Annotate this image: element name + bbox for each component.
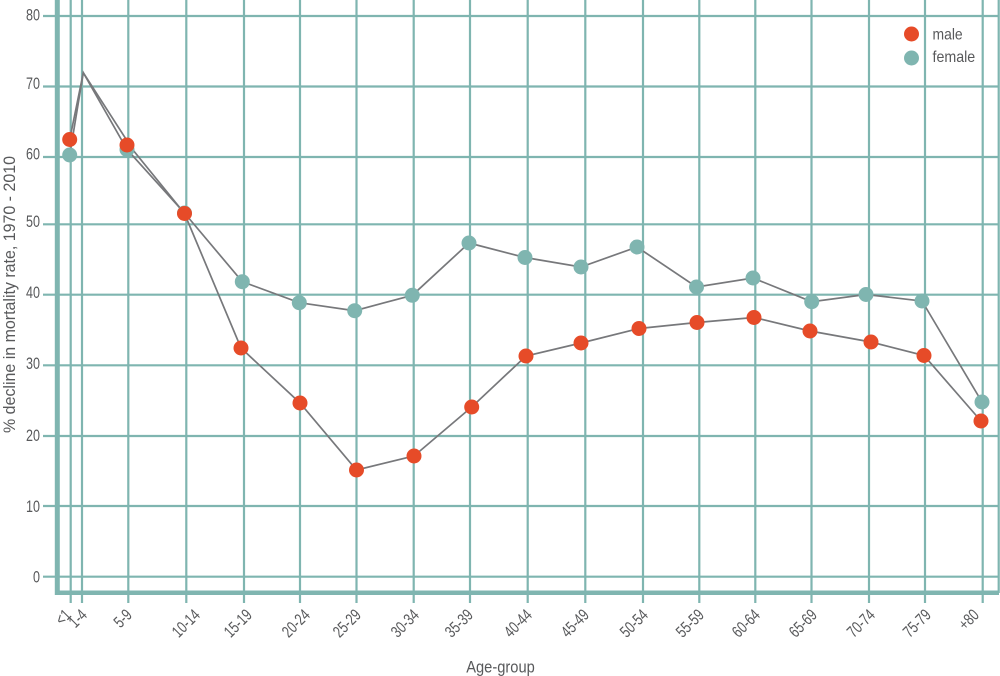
x-axis age-group labels: 5-9 [111, 606, 136, 632]
y-axis tick labels: 80 [26, 7, 40, 25]
x-axis age-group labels: 75-79 [900, 606, 935, 642]
y-axis tick labels: 10 [26, 498, 40, 517]
x-axis age-group labels: 60-64 [729, 606, 764, 642]
x-axis age-group labels: 1-4 [66, 606, 91, 632]
x-axis age-group labels: 35-39 [442, 606, 477, 642]
x-axis age-group labels: 25-29 [330, 606, 365, 642]
y-axis tick labels: 20 [26, 427, 40, 446]
y-axis tick labels [26, 7, 40, 587]
y-axis tick labels: 30 [26, 355, 40, 374]
line: female series [70, 73, 982, 402]
female data points [62, 142, 989, 410]
x-axis age-group labels: 30-34 [388, 606, 423, 642]
x-axis age-group labels: 15-19 [221, 606, 256, 642]
x-axis age-group labels: 50-54 [617, 606, 652, 642]
x-axis age-group labels: 45-49 [558, 606, 593, 642]
line: male series [70, 73, 981, 470]
y-axis tick labels: 70 [26, 75, 40, 94]
legend [904, 26, 975, 66]
y-axis tick labels: 0 [33, 569, 40, 587]
x-axis age-group labels: 20-24 [279, 606, 314, 642]
y-axis tick labels: 60 [26, 146, 40, 164]
x-axis age-group labels: 65-69 [786, 606, 821, 642]
legend: male [932, 26, 963, 44]
x-axis age-group labels [52, 606, 983, 642]
x-axis age-group labels: +80 [956, 606, 983, 634]
male data points [62, 132, 988, 478]
legend: female [932, 48, 975, 66]
x-axis age-group labels: 70-74 [844, 606, 879, 642]
x-axis age-group labels: 40-44 [501, 606, 536, 642]
x-axis age-group labels: 55-59 [673, 606, 708, 642]
x-axis age-group labels: 10-14 [169, 606, 204, 642]
y-axis title: % decline in mortality rate, 1970 - 2010 [1, 156, 19, 433]
x-axis age-group labels: <1 [52, 606, 75, 629]
y-axis tick labels: 40 [26, 284, 40, 303]
y-axis tick labels: 50 [26, 213, 40, 232]
